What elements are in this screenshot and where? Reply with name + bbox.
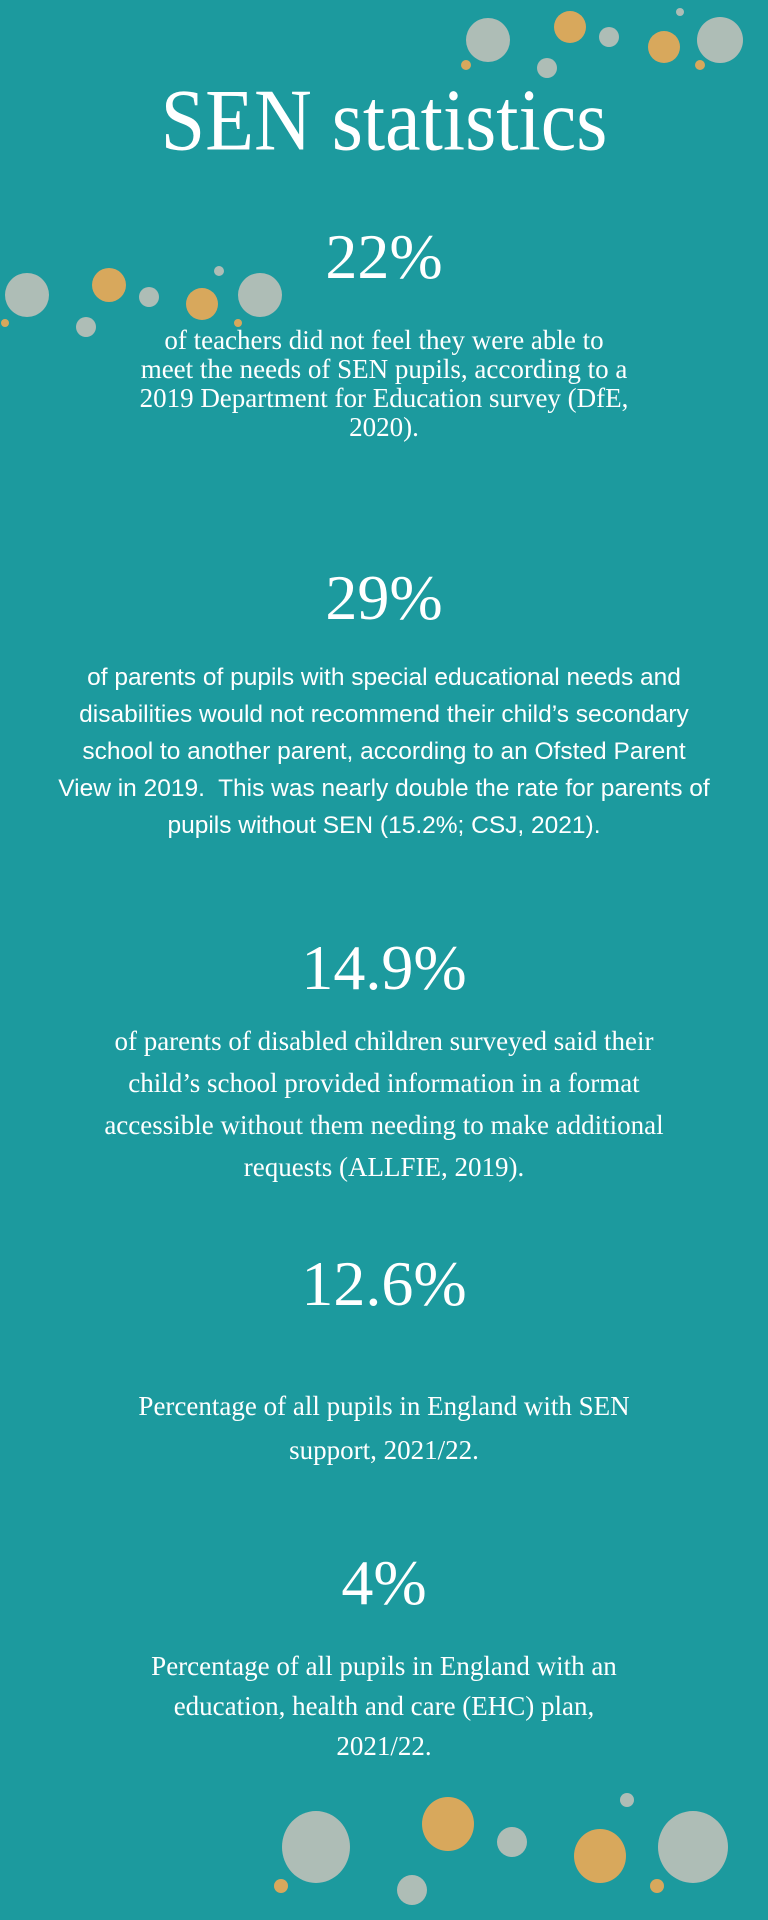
text: SEN support [138, 1391, 630, 1465]
text: accessible information: of parents of disabled children surveyed said their [114, 1026, 654, 1056]
title: SEN statistics [161, 73, 607, 169]
decoration: top right circles [461, 8, 743, 78]
text: accessible information: accessible without them needing to make additional [104, 1110, 664, 1140]
text: SEN support: support, 2021/22. [289, 1435, 479, 1465]
text: EHC plan [151, 1651, 617, 1761]
text: teachers: of teachers did not feel they were able to [164, 325, 604, 355]
text: EHC plan: education, health and care (EHC) plan, [174, 1691, 594, 1721]
stat 4%: 4% [341, 1547, 427, 1618]
text: parents recommendation: disabilities would not recommend their child’s secondary [79, 701, 689, 728]
decoration: bottom circles [274, 1793, 728, 1905]
text: teachers: 2020). [349, 412, 419, 442]
text: accessible information: requests (ALLFIE, 2019). [244, 1152, 524, 1182]
text: teachers: meet the needs of SEN pupils, according to a [141, 354, 627, 384]
text: parents recommendation: pupils without SEN (15.2%; CSJ, 2021). [167, 812, 601, 839]
text: parents recommendation [58, 664, 710, 839]
text: EHC plan: 2021/22. [336, 1731, 432, 1761]
text: parents recommendation: View in 2019. This was nearly double the rate for parents of [58, 775, 710, 802]
text: parents recommendation: of parents of pupils with special educational needs and [87, 664, 681, 691]
decoration: left circles [1, 266, 282, 337]
stat 22%: 22% [325, 221, 443, 292]
stat 29%: 29% [325, 562, 443, 633]
stat 14.9%: 14.9% [301, 932, 467, 1003]
text: accessible information: child’s school provided information in a format [128, 1068, 640, 1098]
text: accessible information [104, 1026, 664, 1182]
text: SEN support: Percentage of all pupils in England with SEN [138, 1391, 630, 1421]
text: teachers: 2019 Department for Education survey (DfE, [140, 383, 628, 413]
text: teachers [140, 325, 628, 442]
text: EHC plan: Percentage of all pupils in England with an [151, 1651, 617, 1681]
text: parents recommendation: school to another parent, according to an Ofsted Parent [82, 738, 686, 765]
stat 12.6%: 12.6% [301, 1248, 467, 1319]
